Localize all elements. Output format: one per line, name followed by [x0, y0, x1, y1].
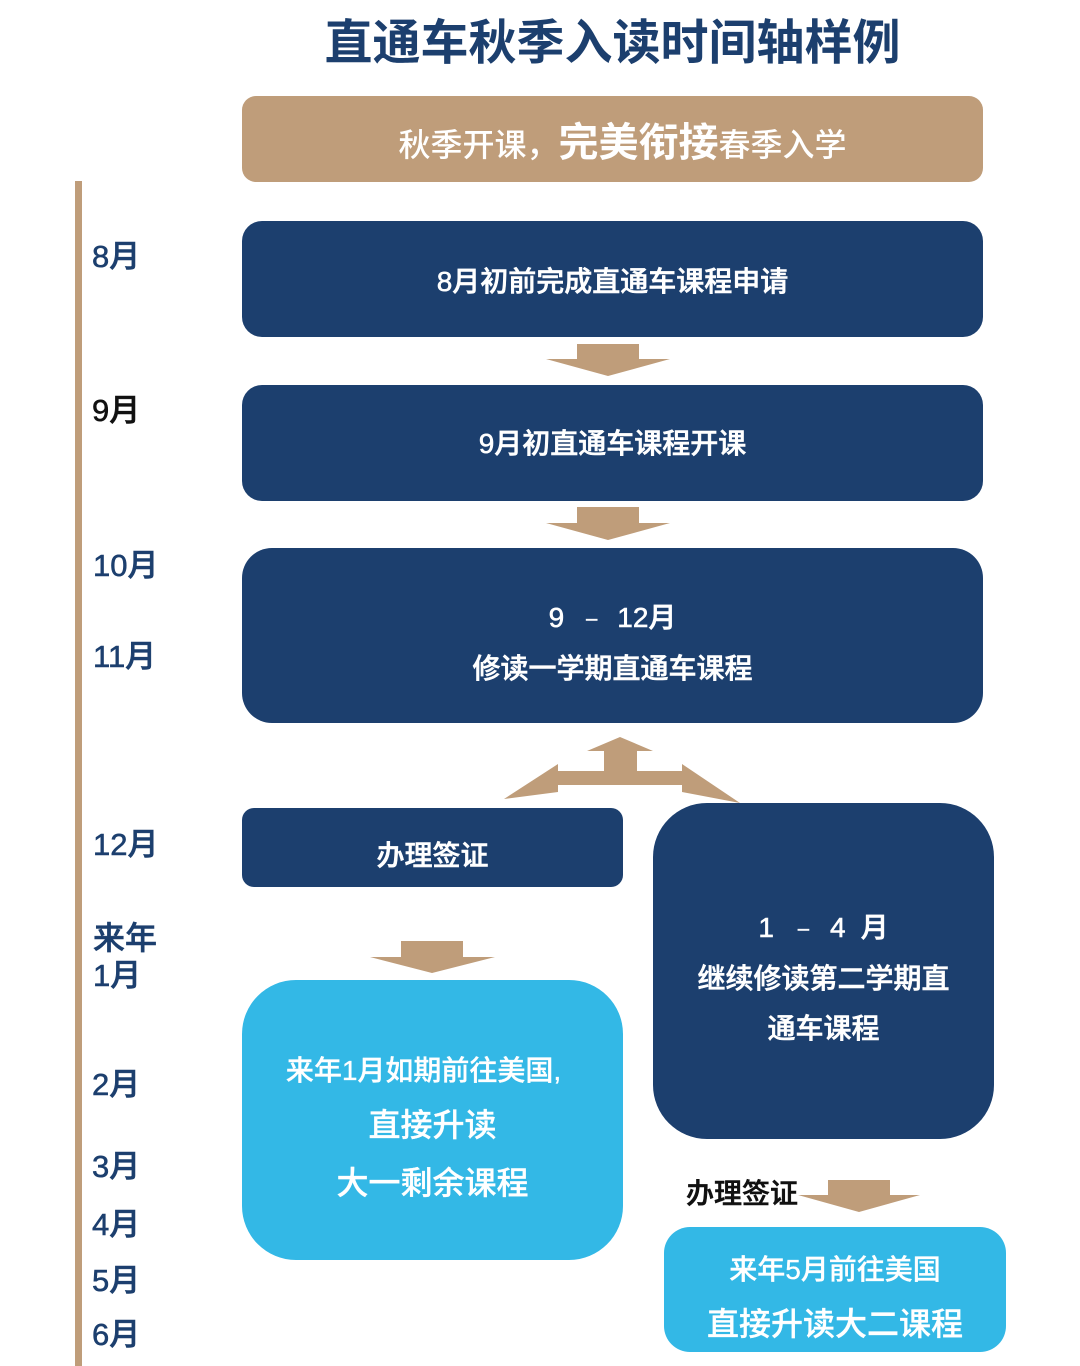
month labels: 11月: [93, 639, 156, 674]
month labels: 3月: [92, 1149, 140, 1184]
step: visa: 办理签证: [376, 840, 488, 870]
step: second semester: 通车课程: [767, 1013, 880, 1044]
arrow down 3: [370, 941, 495, 973]
timeline axis: [75, 181, 82, 1366]
step: second semester: 1 – 4 月: [758, 912, 889, 943]
step: application: 8月初前完成直通车课程申请: [437, 266, 788, 297]
visa label: 办理签证: [686, 1178, 798, 1209]
step: course start: 9月初直通车课程开课: [479, 428, 746, 459]
arrow: split up: [504, 737, 740, 803]
arrow down 1: [546, 344, 670, 376]
month labels: 5月: [92, 1263, 140, 1298]
step: first semester: 9 – 12月: [549, 602, 676, 632]
month labels: [92, 239, 158, 1352]
step: first semester: [242, 548, 983, 723]
step: travel May: 来年5月前往美国: [729, 1254, 941, 1284]
month labels: 12月: [93, 827, 158, 862]
month labels: 1月: [93, 958, 141, 993]
step: travel January: 大一剩余课程: [336, 1164, 528, 1200]
month labels: 9月: [92, 393, 140, 428]
step: visa: [242, 808, 623, 887]
step: travel January: 来年1月如期前往美国,: [286, 1054, 561, 1086]
month labels: 6月: [92, 1317, 140, 1352]
month labels: 2月: [92, 1067, 140, 1102]
month labels: 4月: [92, 1207, 140, 1242]
step: travel January: [242, 980, 623, 1260]
step: travel May: 直接升读大二课程: [707, 1306, 963, 1342]
arrow down 4: [798, 1180, 920, 1212]
step: second semester: 继续修读第二学期直: [697, 963, 950, 994]
month labels: 来年: [93, 920, 157, 956]
step: travel May: [664, 1227, 1006, 1352]
month labels: 10月: [93, 548, 158, 583]
step: first semester: 修读一学期直通车课程: [472, 652, 752, 684]
banner: [242, 96, 983, 182]
step: second semester: [653, 803, 994, 1139]
step: application: [242, 221, 983, 337]
title: 直通车秋季入读时间轴样例: [324, 17, 900, 70]
banner: 秋季开课，完美衔接春季入学: [398, 121, 847, 165]
step: travel January: 直接升读: [368, 1106, 496, 1142]
month labels: 8月: [92, 239, 140, 274]
arrow down 2: [546, 507, 670, 540]
step: course start: [242, 385, 983, 501]
